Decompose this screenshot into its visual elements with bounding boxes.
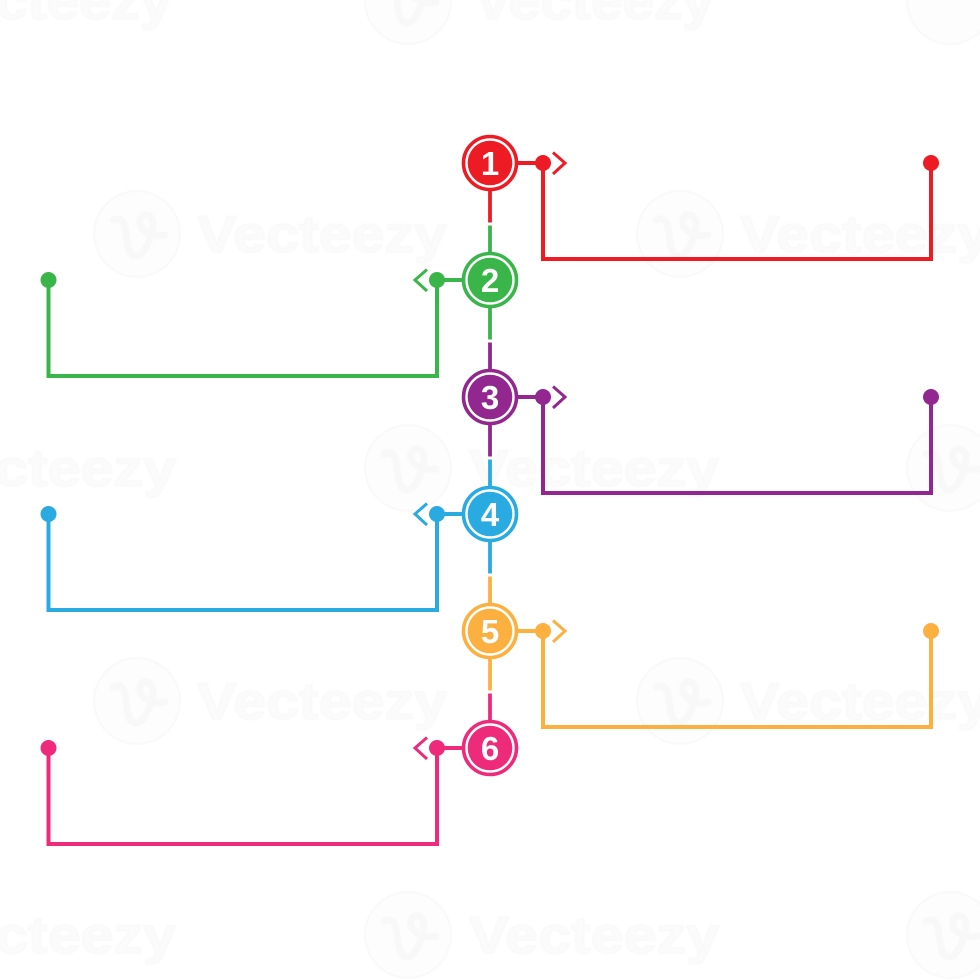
connector stem 2 up [488,226,492,254]
bracket dot 6 end [40,740,56,756]
bracket 2 [48,280,464,376]
bracket 4 [48,514,464,610]
watermark row 4: Vecteezy [197,673,447,731]
chevron 5 [553,620,565,642]
connector stem 3 up [488,342,492,371]
step 3: purple, right bracket [464,342,939,493]
bracket dot 6 start [429,740,445,756]
badge 3: 3 [481,379,499,416]
chevron 3 [553,386,565,408]
watermark row 4: Vecteezy [740,673,980,731]
badge 2 [464,254,516,306]
badge 2: 2 [481,262,499,299]
bracket dot 1 end [923,155,939,171]
connector stem 6 up [488,694,492,722]
bracket dot 2 start [429,272,445,288]
chevron 4 [415,504,427,525]
watermark row 2: Vecteezy [197,206,447,264]
connector stem 5 up [488,576,492,605]
bracket dot 2 end [40,272,56,288]
connector stem 3 down [488,424,492,456]
bracket 1 [516,163,931,259]
connector stem 5 down [488,658,492,690]
connector stem 4 up [488,460,492,488]
watermark row 3: Vecteezy [469,440,719,498]
bracket dot 3 start [535,389,551,405]
badge 4 [464,488,516,540]
badge 6 [464,722,516,774]
chevron 1 [553,152,565,174]
connector stem 4 down [488,541,492,574]
badge 1 [464,136,516,190]
connector stem 1 down [488,190,492,222]
step 1: red, right bracket [464,136,939,259]
bracket dot 4 start [429,506,445,522]
badge 5: 5 [481,613,499,650]
watermark row 2: Vecteezy [740,206,980,264]
bracket 3 [516,397,931,493]
step 2: green, left bracket [40,226,516,376]
badge 4: 4 [481,496,500,533]
bracket dot 5 start [535,623,551,639]
step 6: pink, left bracket [40,694,516,844]
step 4: blue, left bracket [40,460,516,610]
badge 3 [464,370,516,424]
step 5: orange, right bracket [464,576,939,727]
chevron 6 [415,738,427,759]
bracket dot 5 end [923,623,939,639]
badge 6: 6 [481,730,499,767]
watermark row 5 [0,892,980,978]
connector stem 2 down [488,307,492,340]
chevron 2 [415,270,427,291]
watermark row 5: Vecteezy [469,907,719,965]
badge 1: 1 [481,145,499,182]
watermark row 1 [0,0,980,44]
badge 5 [464,604,516,658]
watermark row 4 [94,658,980,744]
bracket dot 1 start [535,155,551,171]
watermark row 3 [0,425,980,511]
bracket dot 3 end [923,389,939,405]
bracket 5 [516,631,931,727]
bracket dot 4 end [40,506,56,522]
watermark row 2 [94,191,980,277]
bracket 6 [48,748,464,844]
